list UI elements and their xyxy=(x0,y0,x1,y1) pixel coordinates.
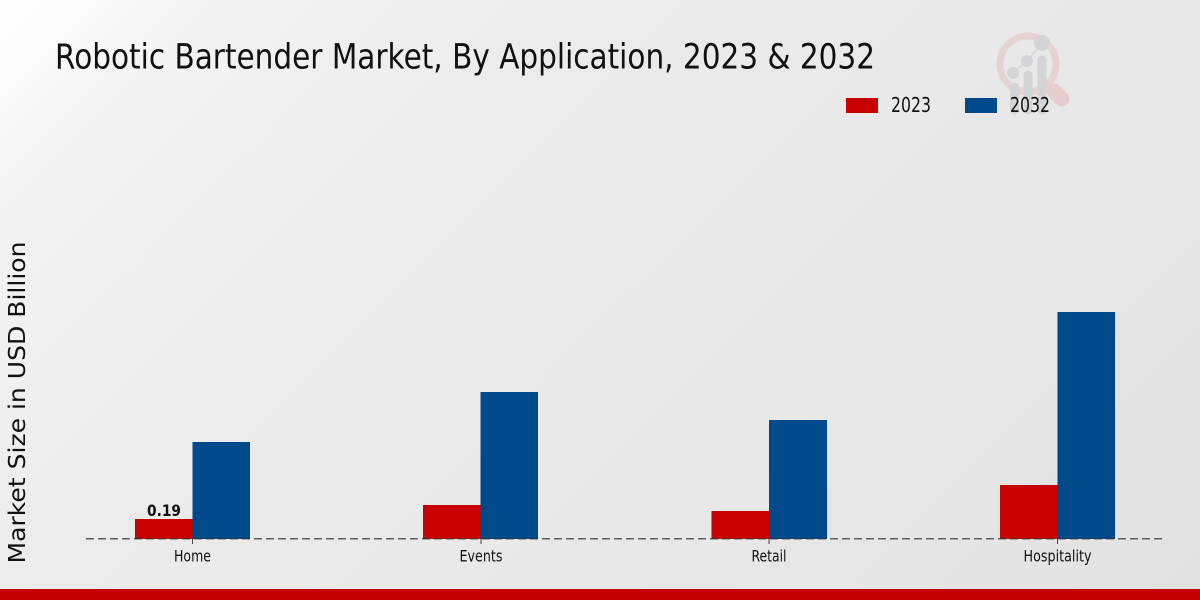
icon: watermark logo xyxy=(1000,35,1062,110)
legend xyxy=(846,93,1050,117)
legend: 2032: 2032 xyxy=(1010,93,1050,117)
group: Retail xyxy=(712,420,827,566)
group: Home: 0.19 xyxy=(147,501,181,520)
bar chart xyxy=(86,312,1164,566)
group: Retail: Retail xyxy=(752,546,786,566)
group: Home: Home xyxy=(174,546,211,566)
group: Events: Events xyxy=(460,546,502,566)
group: Hospitality: Hospitality xyxy=(1024,546,1092,566)
y axis label: Market Size in USD Billion xyxy=(5,242,31,564)
title: Robotic Bartender Market, By Application, 2023 & 2032 xyxy=(55,38,875,78)
legend: 2023: 2023 xyxy=(891,93,931,117)
group: Home xyxy=(135,442,250,566)
group: Hospitality xyxy=(1000,312,1115,566)
footer bar xyxy=(0,589,1200,600)
legend: 2032 xyxy=(965,93,1050,117)
group: Events xyxy=(423,392,538,566)
legend: 2023 xyxy=(846,93,931,117)
